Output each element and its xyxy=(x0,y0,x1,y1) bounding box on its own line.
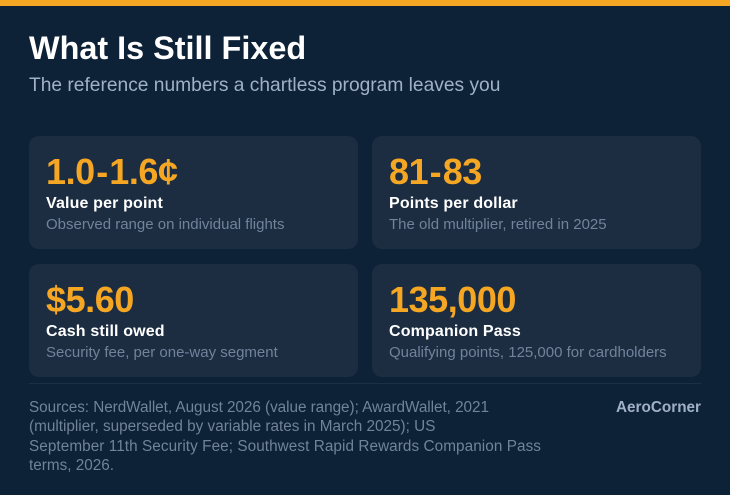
panel: companion pass xyxy=(372,264,701,377)
panel: points per dollar xyxy=(372,136,701,249)
stat note: Observed range on individual flights xyxy=(46,216,284,233)
sources text: Sources: NerdWallet, August 2026 (value range); AwardWallet, 2021 xyxy=(29,399,489,416)
brand name: AeroCorner xyxy=(616,399,701,416)
stat label: Points per dollar xyxy=(389,195,518,212)
stat note: Qualifying points, 125,000 for cardholders xyxy=(389,344,667,361)
top accent bar xyxy=(0,0,730,6)
stat label: Cash still owed xyxy=(46,323,165,340)
stat value: 135,000 xyxy=(389,279,516,320)
sources text xyxy=(29,399,541,474)
stat value: $5.60 xyxy=(46,279,134,320)
sources text: terms, 2026. xyxy=(29,457,114,474)
sources text: September 11th Security Fee; Southwest Rapid Rewards Companion Pass xyxy=(29,438,541,455)
stat note: Security fee, per one-way segment xyxy=(46,344,278,361)
panel: value per point xyxy=(29,136,358,249)
stat value: 1.0-1.6¢ xyxy=(46,151,178,192)
stat label: Value per point xyxy=(46,195,163,212)
stat value: 81-83 xyxy=(389,151,482,192)
title: What Is Still Fixed xyxy=(29,30,306,66)
stat note: The old multiplier, retired in 2025 xyxy=(389,216,607,233)
sources text: (multiplier, superseded by variable rates in March 2025); US xyxy=(29,418,435,435)
subtitle: The reference numbers a chartless program leaves you xyxy=(29,75,500,96)
stat label: Companion Pass xyxy=(389,323,521,340)
panel: cash still owed xyxy=(29,264,358,377)
